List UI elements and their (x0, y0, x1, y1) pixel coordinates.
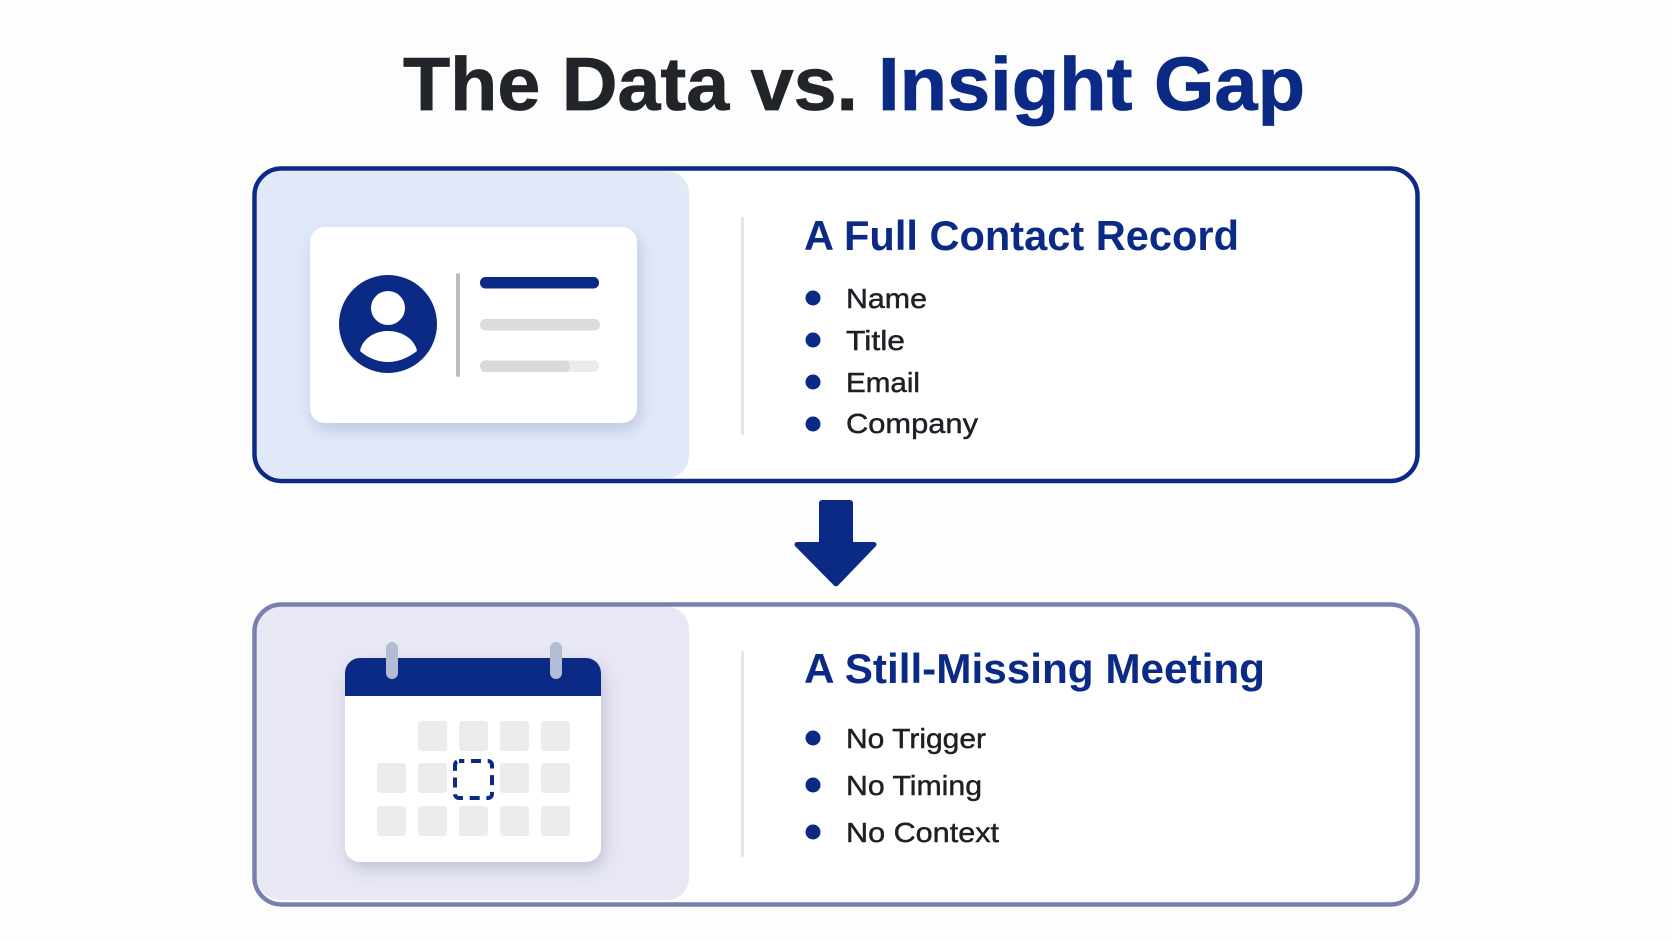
list: contact fields (806, 283, 978, 439)
card line: name bar (480, 277, 599, 288)
icon: contact card (310, 227, 637, 423)
heading: a still-missing meeting: A Still-Missing Meeting (804, 645, 1265, 692)
title (403, 42, 1305, 126)
list: contact fields: Company (846, 408, 978, 439)
title: The Data vs. (403, 42, 858, 126)
icon: avatar (339, 275, 437, 373)
panel: a still-missing meeting (254, 604, 1418, 904)
list: missing items (806, 723, 999, 848)
calendar header (345, 658, 601, 696)
calendar day cells (377, 721, 570, 836)
calendar missing day (453, 759, 494, 800)
icon: calendar (345, 642, 601, 862)
card line: partial bar (480, 360, 599, 372)
list: contact fields: Email (846, 367, 920, 398)
title: Insight Gap (878, 42, 1305, 126)
panel: a full contact record (254, 168, 1418, 481)
list: contact fields: Name (846, 283, 927, 314)
list: missing items: No Timing (846, 770, 982, 801)
arrow: down (794, 500, 876, 586)
card line: title bar (480, 319, 600, 330)
list: missing items: No Context (846, 817, 999, 848)
list: contact fields: Title (846, 325, 905, 356)
heading: a full contact record: A Full Contact Record (804, 212, 1239, 259)
list: missing items: No Trigger (846, 723, 986, 754)
calendar rings (386, 642, 562, 679)
